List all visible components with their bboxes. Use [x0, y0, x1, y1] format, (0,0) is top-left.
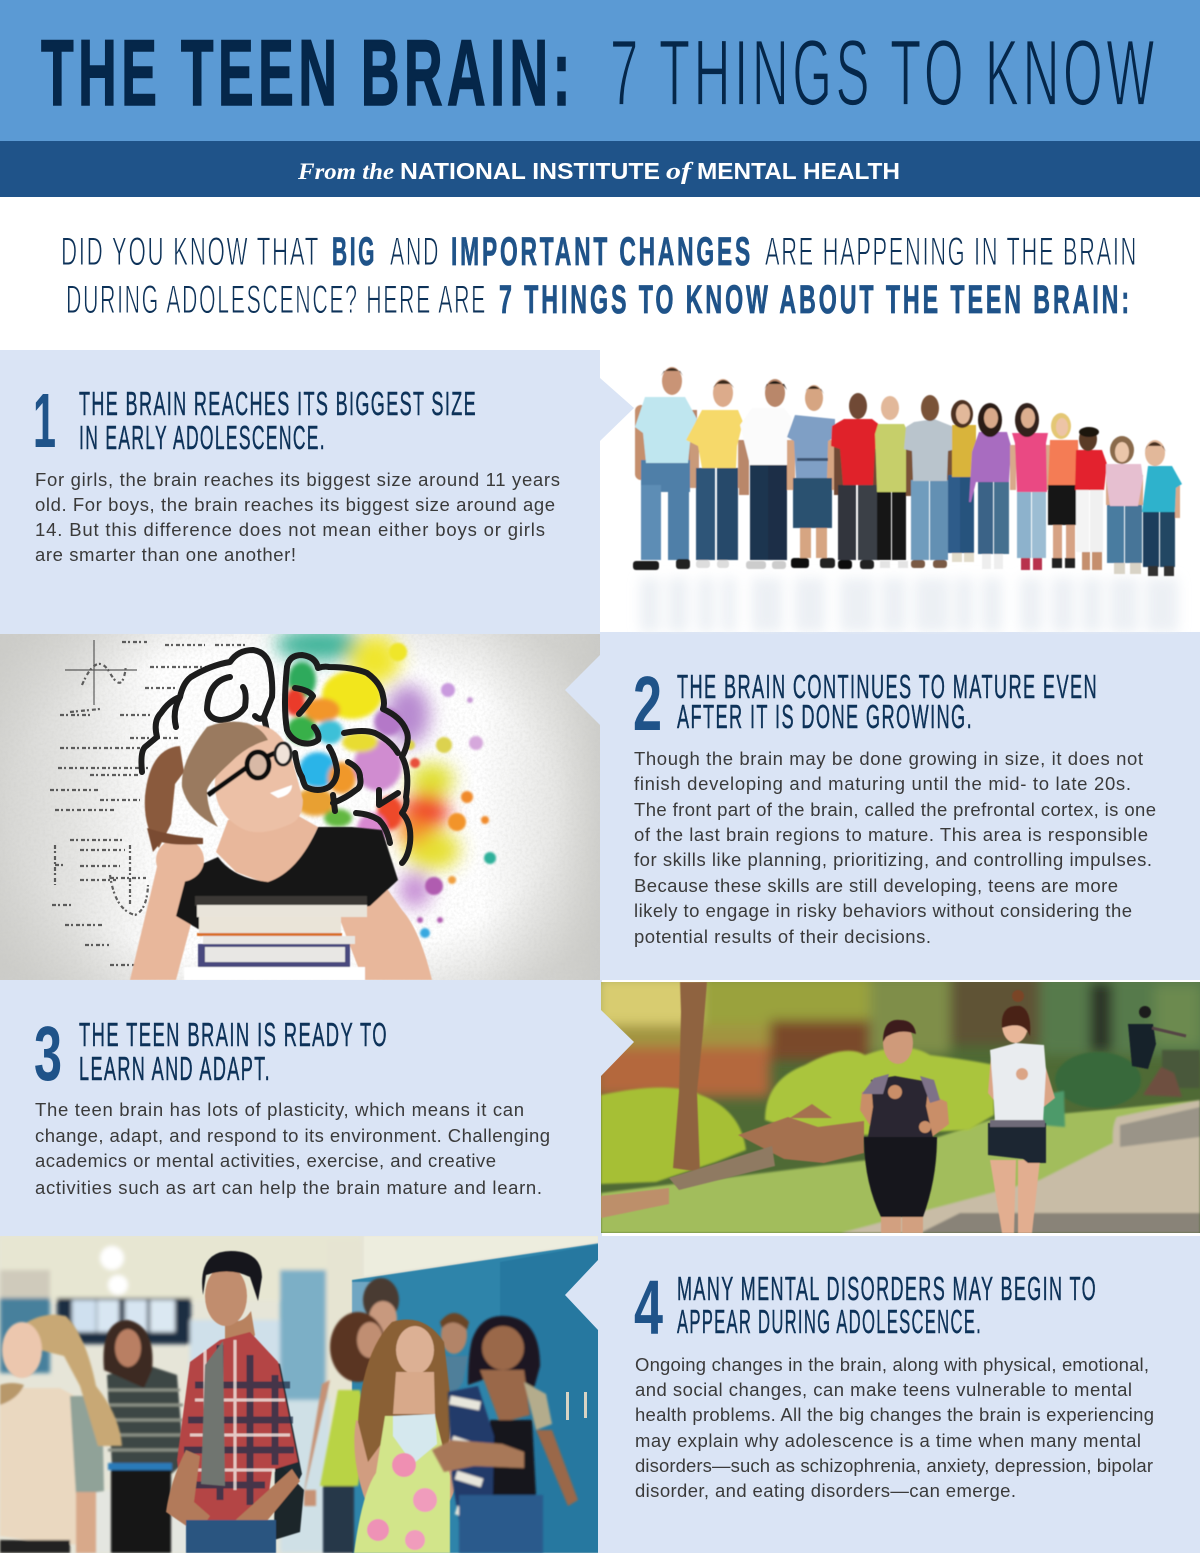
- body 2: potential results of their decisions.: [634, 926, 931, 947]
- title: THE TEEN BRAIN:: [41, 20, 575, 125]
- person 13: [1106, 436, 1143, 574]
- paint splatter: [275, 629, 496, 938]
- person 14: [1142, 440, 1182, 576]
- body 2: of the last brain regions to mature. This area is responsible: [634, 824, 1148, 845]
- students right group: [304, 1278, 469, 1553]
- person 5: [831, 393, 881, 569]
- locker handles: [566, 1392, 587, 1420]
- person 2: [686, 379, 745, 568]
- girl: [130, 722, 432, 980]
- books: [195, 896, 367, 906]
- heading 1: IN EARLY ADOLESCENCE.: [79, 419, 326, 456]
- body 4: Ongoing changes in the brain, along with physical, emotional,: [635, 1354, 1149, 1375]
- park background: [595, 975, 1200, 1097]
- girl blonde left: [0, 1315, 122, 1553]
- heading 1: THE BRAIN REACHES ITS BIGGEST SIZE: [79, 385, 477, 422]
- intro text: BIG: [332, 230, 377, 274]
- intro text: DURING ADOLESCENCE? HERE ARE: [66, 278, 487, 322]
- person 10: [1010, 403, 1050, 570]
- neck and chest: [216, 810, 318, 884]
- person 7: [904, 395, 956, 568]
- hand: [156, 838, 204, 882]
- tree trunk: [673, 982, 707, 1172]
- heading 3: THE TEEN BRAIN IS READY TO: [79, 1016, 388, 1053]
- photo: school hallway: [0, 1236, 600, 1553]
- background girl striped: [104, 1320, 184, 1553]
- body 4: and social changes, can make teens vulnerable to mental: [635, 1379, 1132, 1400]
- body 4: may explain why adolescence is a time when many mental: [635, 1430, 1141, 1451]
- brain fill colours: [285, 662, 403, 847]
- photo: group of teens: [600, 350, 1200, 634]
- shirt: [176, 827, 398, 930]
- photo: teens jogging: [595, 975, 1200, 1233]
- body 2: [634, 748, 1156, 947]
- source line: [297, 158, 900, 185]
- panel: fact 1: [0, 350, 600, 634]
- heading 4: [677, 1270, 1097, 1340]
- body 1: For girls, the brain reaches its biggest size around 11 years: [35, 469, 560, 490]
- runner left: [860, 1020, 949, 1233]
- intro text: AND: [390, 230, 440, 274]
- body 2: Though the brain may be done growing in size, it does not: [634, 748, 1143, 769]
- body 1: old. For boys, the brain reaches its biggest size around age: [35, 494, 555, 515]
- body 3: [35, 1099, 550, 1198]
- body 2: Because these skills are still developing, teens are more: [634, 875, 1118, 896]
- person 12: [1075, 427, 1107, 570]
- intro text: DID YOU KNOW THAT: [61, 230, 320, 274]
- body 3: academics or mental activities, exercise, and creative: [35, 1150, 496, 1171]
- heading 2: AFTER IT IS DONE GROWING.: [677, 698, 973, 735]
- body 1: are smarter than one another!: [35, 544, 296, 565]
- body 4: health problems. All the big changes the brain is experiencing: [635, 1404, 1154, 1425]
- panel: fact 3: [0, 980, 602, 1236]
- number 4: 4: [634, 1265, 663, 1351]
- panel: fact 2: [565, 634, 1200, 980]
- person 3: [739, 379, 792, 569]
- number 3: 3: [34, 1011, 62, 1097]
- glasses: [208, 751, 279, 795]
- hair: [182, 722, 268, 827]
- math scribbles: [50, 640, 245, 965]
- panel: fact 4: [565, 1236, 1200, 1553]
- person 1: [633, 367, 697, 570]
- source band: [0, 141, 1200, 197]
- header band: [0, 0, 1200, 141]
- head: [215, 725, 303, 832]
- arrow: fact 1 to photo: [600, 378, 634, 441]
- body 4: disorder, and eating disorders—can emerge.: [635, 1480, 1016, 1501]
- body 3: change, adapt, and respond to its environment. Challenging: [35, 1125, 550, 1146]
- girl in floral dress: [353, 1318, 455, 1553]
- heading 3: LEARN AND ADAPT.: [79, 1050, 271, 1087]
- intro text: [61, 230, 1138, 322]
- body 2: for skills like planning, prioritizing, and controlling impulses.: [634, 849, 1152, 870]
- body 2: finish developing and maturing until the mid- to late 20s.: [634, 773, 1131, 794]
- brain outline: [141, 650, 410, 863]
- source line: MENTAL HEALTH: [697, 158, 900, 184]
- arms: [130, 866, 432, 980]
- heading 2: [677, 668, 1098, 735]
- hallway background: [0, 1245, 331, 1553]
- girl with striped bag: [432, 1316, 578, 1553]
- photo: girl and brain: [0, 629, 600, 980]
- source line: From the: [297, 159, 394, 184]
- person 11: [1048, 413, 1079, 568]
- number 1: 1: [33, 378, 56, 464]
- intro text: IMPORTANT CHANGES: [451, 230, 753, 274]
- body 2: The front part of the brain, called the prefrontal cortex, is one: [634, 799, 1156, 820]
- number 2: 2: [633, 661, 662, 747]
- source line: of: [666, 159, 694, 185]
- background runner: [1128, 1006, 1186, 1069]
- lockers: [352, 1236, 600, 1553]
- person 8: [948, 400, 976, 562]
- boy in plaid: [166, 1251, 304, 1553]
- ponytail: [145, 746, 184, 848]
- body 2: likely to engage in risky behaviors without considering the: [634, 900, 1132, 921]
- body 4: [635, 1354, 1154, 1501]
- heading 1: [79, 385, 477, 456]
- lawn and path: [601, 1100, 1200, 1233]
- smile: [270, 785, 292, 798]
- body 1: [35, 469, 560, 565]
- rocks: [601, 1104, 864, 1218]
- person 6: [875, 396, 909, 568]
- heading 3: [79, 1016, 388, 1087]
- source line: NATIONAL INSTITUTE: [400, 158, 660, 184]
- body 3: activities such as art can help the brain mature and learn.: [35, 1177, 542, 1198]
- body 3: The teen brain has lots of plasticity, which means it can: [35, 1099, 524, 1120]
- person 4: [787, 385, 835, 568]
- body 1: 14. But this difference does not mean either boys or girls: [35, 519, 545, 540]
- bushes: [601, 1048, 1200, 1184]
- runner right: [988, 990, 1055, 1233]
- arrow: fact 3 to photo: [601, 1010, 634, 1076]
- person 9: [969, 403, 1011, 569]
- body 4: disorders—such as schizophrenia, anxiety, depression, bipolar: [635, 1455, 1153, 1476]
